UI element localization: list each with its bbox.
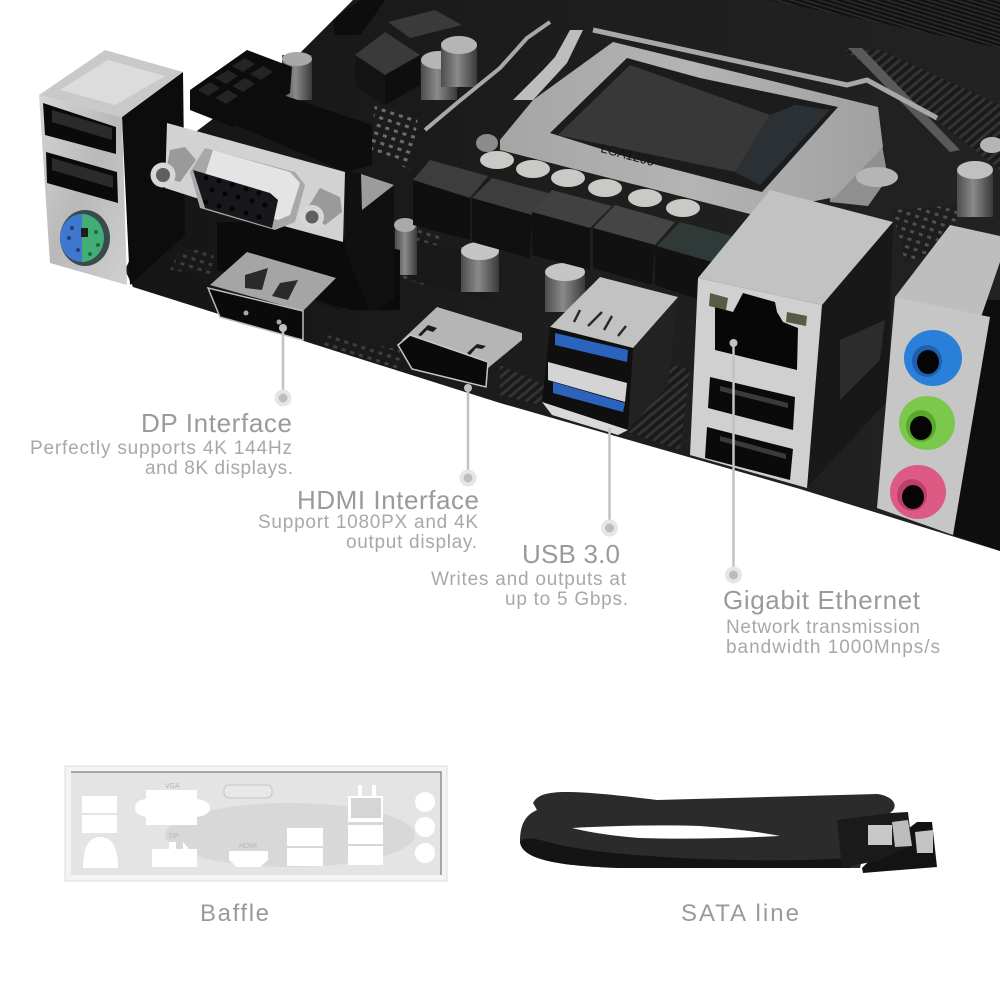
label: Gigabit Ethernet: bandwidth 1000Mnps/s bbox=[726, 637, 940, 658]
label: HDMI Interface bbox=[258, 485, 479, 553]
label: DP Interface: and 8K displays. bbox=[145, 458, 293, 479]
caption: SATA line: SATA line bbox=[681, 900, 799, 927]
motherboard photo bbox=[39, 0, 1000, 551]
PS/2 and USB 2.0 port stack bbox=[39, 50, 185, 285]
SATA plug front bbox=[837, 812, 912, 868]
SATA plug rear bbox=[862, 822, 937, 873]
blue jack bbox=[904, 330, 962, 386]
label: DP Interface: DP Interface bbox=[141, 408, 292, 438]
cable body bbox=[520, 792, 895, 868]
label: USB 3.0: USB 3.0 bbox=[522, 539, 620, 569]
capacitors upper left bbox=[282, 36, 1000, 312]
accessory: baffle I/O shield bbox=[65, 766, 447, 881]
shield RJ45 inner bbox=[351, 798, 381, 818]
USB 3.0 connector bbox=[542, 277, 678, 435]
shield VGA label: VGA bbox=[165, 783, 180, 790]
shield HDMI label: HDMI bbox=[239, 843, 257, 850]
circuit traces and small parts bbox=[170, 103, 960, 450]
pink jack bbox=[890, 465, 946, 519]
label: USB 3.0 bbox=[431, 539, 628, 610]
label: USB 3.0: Writes and outputs at bbox=[431, 569, 627, 590]
label: HDMI Interface: HDMI Interface bbox=[297, 485, 479, 515]
label: DP Interface: Perfectly supports 4K 144Hz bbox=[30, 438, 292, 459]
shield DP label: DP bbox=[169, 833, 179, 840]
label: HDMI Interface: output display. bbox=[346, 532, 477, 553]
Gigabit Ethernet port stack bbox=[690, 190, 893, 488]
DisplayPort connector bbox=[208, 252, 336, 340]
CPU socket frame bbox=[425, 22, 937, 214]
label: DP Interface bbox=[30, 408, 293, 479]
callout line: USB 3.0 bbox=[601, 428, 618, 536]
shield plate bbox=[65, 766, 447, 881]
RAM slots bbox=[770, 0, 1000, 170]
CPU socket frame: LGA1200 bbox=[599, 140, 656, 169]
board surface bbox=[125, 0, 1000, 551]
capacitor tops row bbox=[480, 151, 700, 217]
callout line: DP bbox=[274, 324, 292, 406]
label: USB 3.0: up to 5 Gbps. bbox=[505, 589, 628, 610]
label: HDMI Interface: Support 1080PX and 4K bbox=[258, 512, 478, 533]
shield cut-outs bbox=[82, 785, 435, 868]
shield top embossed mark bbox=[224, 785, 272, 798]
socket cover bbox=[550, 58, 838, 192]
label: Gigabit Ethernet: Gigabit Ethernet bbox=[723, 585, 921, 615]
loop gap bbox=[572, 825, 780, 839]
callout line: Ethernet bbox=[725, 339, 742, 584]
8-pin power connector bbox=[190, 50, 292, 127]
VGA connector bbox=[150, 93, 400, 312]
HDMI connector bbox=[398, 307, 522, 387]
audio jack panel bbox=[877, 225, 1000, 551]
accessory: SATA cable bbox=[520, 792, 937, 873]
label: Gigabit Ethernet bbox=[723, 585, 940, 658]
top-left heat-sink blocks bbox=[333, 0, 462, 105]
green jack bbox=[899, 396, 955, 450]
caption: Baffle: Baffle bbox=[200, 900, 269, 927]
label: Gigabit Ethernet: Network transmission bbox=[726, 617, 920, 638]
power chokes bbox=[413, 160, 732, 300]
callout line: HDMI bbox=[460, 384, 476, 486]
